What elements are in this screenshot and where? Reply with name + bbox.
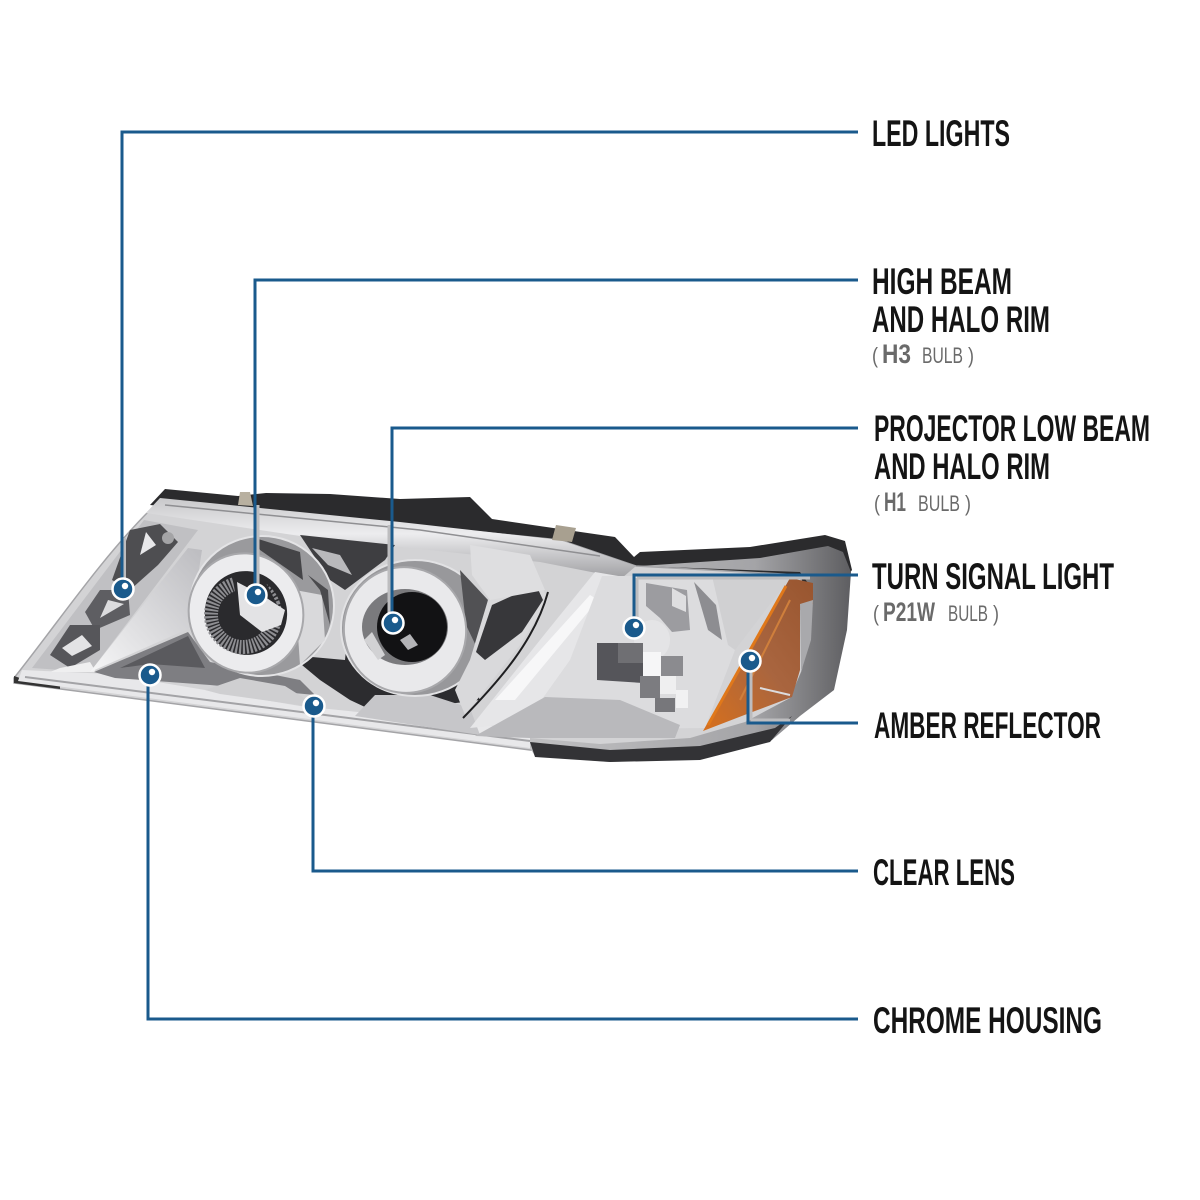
- LED section: [32, 520, 198, 672]
- lower left dark reflector: [94, 632, 315, 695]
- leader: clear lens: [313, 706, 858, 871]
- label: projector low beam and halo rim: BULB: [918, 491, 960, 516]
- projector chrome ring: [341, 560, 489, 696]
- diagonal chrome blade: [470, 572, 630, 728]
- high beam outer chrome ring: [190, 536, 334, 676]
- label: high beam and halo rim: BULB: [922, 343, 963, 368]
- marker: high beam: [246, 584, 266, 606]
- marker: clear lens: [304, 696, 324, 716]
- left black tip: [14, 676, 60, 689]
- turn signal reflector: [475, 576, 740, 738]
- black top housing: [150, 489, 852, 600]
- label: projector low beam and halo rim: [874, 408, 1150, 517]
- lower bowls: [205, 678, 320, 708]
- marker: amber reflector: [740, 650, 760, 672]
- marker: turn signal: [624, 618, 644, 638]
- leader: projector low beam: [389, 428, 858, 622]
- label: turn signal light: [872, 556, 1114, 627]
- marker: projector: [382, 612, 404, 634]
- label: LED lights: LED LIGHTS: [872, 113, 1010, 154]
- leader: chrome housing: [148, 675, 858, 1019]
- texture around rings top: [300, 535, 395, 590]
- label: turn signal light: (: [873, 601, 880, 626]
- label: projector low beam and halo rim: (: [874, 491, 881, 516]
- white wedge: [90, 548, 202, 672]
- marker: LED lights: [112, 578, 134, 600]
- projector lens: [362, 589, 448, 665]
- leader: LED lights: [122, 132, 858, 588]
- label: high beam and halo rim: ): [968, 343, 974, 368]
- high beam inner: [193, 560, 299, 666]
- label: clear lens: CLEAR LENS: [873, 852, 1015, 893]
- label: turn signal light: BULB: [948, 601, 988, 626]
- marker: chrome housing: [140, 664, 160, 686]
- bottom chrome strip: [18, 670, 530, 748]
- bottom black strip: [530, 716, 792, 762]
- label: high beam and halo rim: HIGH BEAM: [872, 261, 1012, 302]
- label: high beam and halo rim: (: [872, 343, 879, 368]
- label: high beam and halo rim: AND HALO RIM: [872, 299, 1050, 340]
- label: turn signal light: P21W: [883, 597, 935, 627]
- projector halo ring: [330, 553, 480, 707]
- label: projector low beam and halo rim: AND HALO RIM: [874, 446, 1050, 487]
- dark cavity between rings: [290, 610, 480, 714]
- leader: amber reflector: [748, 660, 858, 723]
- upper trim band: [146, 498, 636, 578]
- pale panel: [712, 576, 790, 650]
- high beam halo ring: [172, 537, 320, 689]
- headlight illustration: [14, 489, 852, 762]
- label: high beam and halo rim: [872, 261, 1050, 369]
- label: turn signal light: ): [993, 601, 999, 626]
- label: high beam and halo rim: H3: [882, 339, 911, 369]
- gray side frame: [530, 546, 851, 762]
- leader: high beam: [255, 280, 858, 594]
- tab clips: [238, 492, 253, 506]
- leader: turn signal: [634, 575, 858, 627]
- inner dark shard: [455, 545, 548, 718]
- label: projector low beam and halo rim: H1: [884, 487, 906, 517]
- body silhouette: [14, 500, 815, 752]
- label: projector low beam and halo rim: ): [965, 491, 971, 516]
- amber reflector: [703, 578, 813, 731]
